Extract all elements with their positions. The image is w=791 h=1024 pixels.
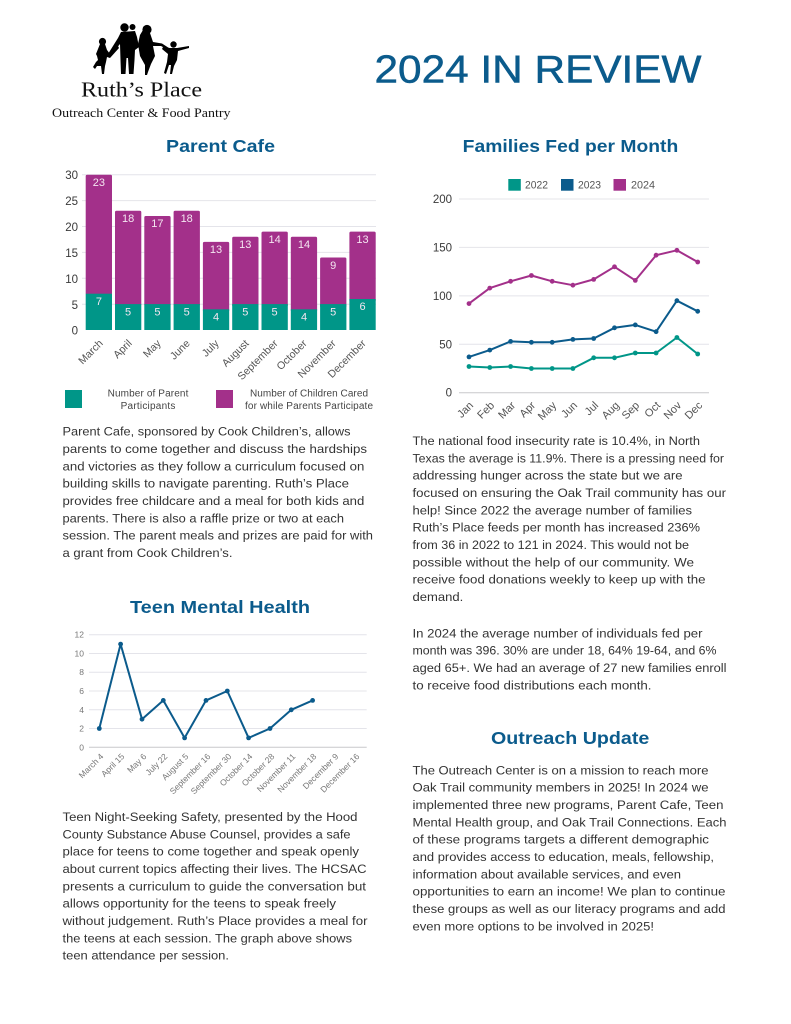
- value labels: 7: [96, 296, 102, 308]
- value labels: 5: [125, 306, 131, 318]
- value labels: 23: [93, 177, 105, 189]
- x axis labels: Jan: [455, 400, 476, 421]
- y axis labels: 25: [65, 196, 78, 208]
- value labels: 13: [239, 239, 251, 251]
- text block: Outreach Update: [412, 763, 726, 933]
- x axis labels: September 30: [189, 751, 234, 796]
- x axis labels: October 14: [218, 751, 255, 788]
- y axis labels: 8: [79, 667, 84, 677]
- x axis labels: Jul: [583, 400, 601, 418]
- text block: food insecurity: Texas the average is 11.9%. There is a pressing need for: [412, 451, 724, 465]
- y axis labels: 6: [79, 686, 84, 696]
- x axis labels: July: [200, 337, 222, 359]
- bar chart: Parent Cafe: [65, 170, 376, 383]
- value labels: 9: [330, 260, 336, 272]
- x axis labels: November 11: [255, 751, 298, 794]
- value labels: 4: [301, 312, 307, 324]
- x axis labels: Oct: [643, 400, 663, 420]
- logo: Ruth's Place: [52, 23, 231, 120]
- text block: Outreach Update: Oak Trail community members in 2025! In 2024 we: [412, 781, 709, 795]
- x axis labels: [455, 399, 705, 423]
- text block: food insecurity: demand.: [412, 590, 463, 604]
- text block: Teen Night: Teen Night-Seeking Safety, presented by the Hood: [62, 810, 358, 824]
- y axis labels: 2: [79, 724, 84, 734]
- x axis labels: December: [326, 337, 369, 381]
- value labels: 5: [330, 306, 336, 318]
- x axis labels: August: [220, 338, 252, 369]
- heading: Parent Cafe: Parent Cafe: [166, 136, 275, 156]
- x axis labels: Nov: [662, 399, 684, 422]
- value labels: 5: [154, 306, 160, 318]
- y axis labels: 0: [79, 742, 84, 752]
- text block: food insecurity: from 36 in 2022 to 121 in 2024. This would not be: [412, 538, 689, 552]
- series 2023: [469, 301, 698, 357]
- text block: Teen Night: teen attendance per session.: [62, 949, 229, 963]
- purple bars: [86, 175, 376, 312]
- x axis labels: October 28: [240, 751, 277, 788]
- text block: Parent Cafe: [62, 425, 373, 560]
- text block: Outreach Update: these groups as well as our literacy programs and add: [412, 902, 726, 916]
- text block: Teen Night: presents a curriculum to guide the conversation but: [62, 879, 367, 893]
- text block: Teen Night: about current topics affecting their lives. The HCSAC: [62, 862, 367, 876]
- text block: Parent Cafe: and victories as they follow a curriculum focused on: [62, 459, 364, 473]
- x axis labels: May: [141, 337, 164, 360]
- text block: Outreach Update: opportunities to earn an income! We plan to continue: [412, 885, 726, 899]
- legend item: 2023: [561, 179, 601, 192]
- x axis labels: [77, 751, 362, 796]
- legend item: children: for while Parents Participate: [245, 401, 373, 412]
- y axis labels: 200: [433, 194, 452, 206]
- text block: Parent Cafe: session. The parent meals and prizes are paid for with: [62, 529, 373, 543]
- y axis labels: 100: [433, 291, 452, 303]
- y axis labels: [65, 170, 78, 338]
- legend item: 2022: 2022: [525, 180, 548, 192]
- text block: Teen Night: without judgement. Ruth’s Place provides a meal for: [61, 914, 368, 928]
- value labels: 14: [298, 239, 310, 251]
- value labels: 18: [122, 213, 134, 225]
- text block: food insecurity: aged 65+. We had an average of 27 new families enroll: [412, 661, 726, 675]
- series 2024: [469, 250, 698, 304]
- text block: Outreach Update: information about available services, and even: [412, 867, 681, 881]
- value labels: 17: [151, 218, 164, 230]
- x axis labels: Jun: [559, 400, 580, 421]
- x axis labels: March: [76, 338, 106, 367]
- x axis labels: Apr: [518, 399, 538, 420]
- text block: Outreach Update: even more options to be involved in 2025!: [412, 919, 654, 933]
- value labels: 4: [213, 312, 219, 324]
- value labels: 13: [356, 234, 369, 246]
- text block: food insecurity: possible without the help of our community. We: [412, 555, 694, 569]
- y axis labels: 12: [75, 630, 84, 640]
- x axis labels: September 16: [168, 751, 213, 796]
- text block: food insecurity: month was 396. 30% are under 18, 64% 19-64, and 6%: [412, 644, 717, 658]
- y axis labels: 20: [65, 222, 78, 234]
- title: 2024 IN REVIEW: [374, 49, 702, 92]
- value labels: 5: [184, 306, 190, 318]
- x axis labels: March 4: [77, 751, 106, 780]
- y axis labels: 10: [75, 648, 84, 658]
- y axis labels: 150: [433, 242, 452, 254]
- legend item: parents: Participants: [121, 401, 175, 412]
- teal bars: [86, 294, 376, 330]
- line chart: Teen Mental Health: [75, 630, 367, 796]
- x axis labels: July 22: [143, 751, 170, 777]
- icon: family silhouette: [93, 23, 189, 75]
- y axis labels: 0: [72, 326, 78, 338]
- x axis labels: December 16: [318, 751, 362, 794]
- legend: Parent Cafe: [65, 388, 373, 412]
- x axis labels: August 5: [160, 751, 191, 782]
- x axis labels: November: [296, 337, 339, 381]
- text block: food insecurity: addressing hunger across the state but we are: [412, 469, 683, 483]
- x axis labels: Aug: [600, 400, 622, 422]
- line chart: Families Fed per Month: [433, 194, 709, 423]
- legend item: children: Number of Children Cared: [250, 388, 368, 400]
- x axis labels: June: [168, 338, 193, 362]
- legend item: 2024: [614, 179, 655, 192]
- text block: food insecurity: to receive food distributions each month.: [412, 678, 652, 692]
- text block: Teen Night: the teens at each session. The graph above shows: [62, 931, 352, 945]
- y axis labels: 10: [65, 274, 78, 286]
- text block: Outreach Update: and provides access to education, meals, fellowship,: [412, 850, 714, 864]
- value labels: 13: [210, 244, 222, 256]
- text block: food insecurity: receive food donations weekly to keep up with the: [412, 573, 706, 587]
- text block: Parent Cafe: a grant from Cook Children’s.: [62, 546, 232, 560]
- text block: Parent Cafe: provides free childcare and a meal for both kids and: [62, 494, 364, 508]
- text block: food insecurity: focused on ensuring the Oak Trail community has our: [412, 486, 726, 500]
- logo name: Ruth’s Place: [81, 78, 202, 102]
- x axis labels: Feb: [475, 400, 497, 422]
- legend item: 2024: 2024: [631, 180, 655, 192]
- legend: Families Fed: [508, 179, 655, 192]
- legend item: 2023: 2023: [578, 180, 601, 192]
- x axis labels: November 18: [275, 751, 319, 794]
- x axis labels: April: [111, 338, 135, 361]
- text block: Teen Night: allows opportunity for the teens to speak freely: [62, 897, 337, 911]
- heading: Families Fed per Month: Families Fed per Month: [463, 136, 678, 156]
- text block: food insecurity: [412, 434, 726, 692]
- legend item: parents: Number of Parent: [108, 388, 189, 400]
- x axis labels: [76, 337, 369, 383]
- x axis labels: Sep: [620, 400, 642, 422]
- x axis labels: December 9: [301, 751, 341, 791]
- data line: [99, 644, 313, 738]
- y axis labels: 5: [72, 300, 78, 312]
- y axis labels: [75, 630, 84, 752]
- logo tagline: Outreach Center & Food Pantry: [52, 106, 231, 120]
- text block: Parent Cafe: building skills to navigate parenting. Ruth’s Place: [62, 477, 349, 491]
- x axis labels: October: [274, 337, 310, 373]
- x axis labels: Mar: [496, 399, 518, 422]
- text block: Parent Cafe: Parent Cafe, sponsored by Cook Children’s, allows: [62, 425, 350, 439]
- x axis labels: April 15: [99, 751, 127, 779]
- text block: Parent Cafe: parents. There is also a raffle prize or two at each: [62, 511, 344, 525]
- y axis labels: 50: [439, 339, 452, 351]
- y axis labels: [433, 194, 452, 400]
- legend item: parents: [65, 388, 189, 412]
- y axis labels: 15: [65, 248, 78, 260]
- heading: Teen Mental Health: Teen Mental Health: [130, 597, 310, 617]
- text block: Teen Night: place for teens to come together and speak openly: [62, 845, 360, 859]
- text block: food insecurity: The national food insecurity rate is 10.4%, in North: [412, 434, 700, 448]
- x axis labels: May: [536, 399, 559, 423]
- y axis labels: 4: [79, 705, 84, 715]
- x axis labels: Dec: [683, 399, 705, 422]
- text block: Outreach Update: The Outreach Center is on a mission to reach more: [412, 763, 709, 777]
- value labels: 6: [359, 301, 366, 313]
- heading: Outreach Update: Outreach Update: [491, 728, 650, 748]
- text block: food insecurity: help! Since 2022 the average number of families: [412, 503, 692, 517]
- series 2022: [469, 338, 698, 368]
- legend item: children: [216, 388, 373, 412]
- y axis labels: 30: [65, 170, 78, 182]
- legend item: 2022: [508, 179, 548, 192]
- text block: Parent Cafe: parents to come together and discuss the hardships: [62, 442, 367, 456]
- text block: Outreach Update: implemented three new programs, Parent Cafe, Teen: [412, 798, 724, 812]
- value labels: 18: [181, 213, 193, 225]
- x axis labels: September: [235, 337, 281, 383]
- value labels: 14: [268, 234, 281, 246]
- text block: Teen Night: County Substance Abuse Counsel, provides a safe: [62, 827, 351, 841]
- y axis labels: 0: [446, 388, 452, 400]
- value labels: [93, 177, 369, 324]
- x axis labels: May 6: [125, 751, 149, 775]
- value labels: 5: [272, 306, 278, 318]
- text block: Outreach Update: Mental Health group, and Oak Trail Connections. Each: [412, 815, 726, 829]
- text block: Outreach Update: of these programs targets a different demographic: [412, 833, 709, 847]
- text block: Teen Night: [61, 810, 368, 963]
- text block: food insecurity: Ruth’s Place feeds per month has increased 236%: [412, 521, 700, 535]
- text block: food insecurity: In 2024 the average number of individuals fed per: [412, 626, 702, 640]
- value labels: 5: [242, 306, 248, 318]
